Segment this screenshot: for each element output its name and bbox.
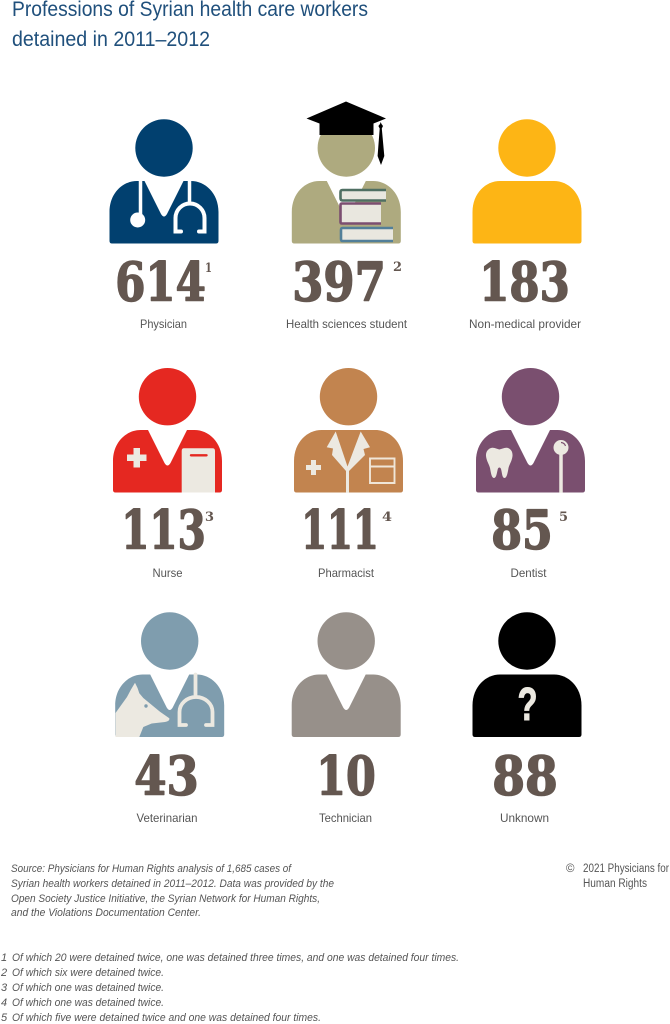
number: 614: 614: [115, 251, 206, 313]
panel: dentist: [476, 368, 585, 580]
icon: dentist figure with tooth and mirror: [476, 368, 585, 493]
footnotes: Of which 20 were detained twice, one was detained three times, and one was detained four times.: [12, 952, 459, 964]
footnotes: 1: [1, 952, 7, 964]
icon: veterinarian figure with dog and stethoscope: [115, 612, 224, 737]
number: 10: 10: [316, 745, 376, 807]
source note: Source: Physicians for Human Rights analysis of 1,685 cases of: [11, 863, 292, 875]
icon: non-medical figure: [472, 119, 582, 244]
number: 113: 113: [121, 499, 206, 561]
icon: nurse figure with cross and clipboard: [113, 368, 222, 492]
label: unknown: Unknown: [500, 811, 549, 825]
icon: pharmacist figure with lab coat: [294, 368, 403, 493]
footnotes: 4: [1, 997, 7, 1009]
panel: nurse: [113, 368, 222, 580]
number: 397: 397: [292, 251, 386, 313]
footnote marker 3: 3: [205, 510, 214, 525]
copyright: [566, 863, 669, 890]
source note: [11, 863, 334, 919]
panel: veterinarian: [115, 612, 224, 825]
footnotes: Of which one was detained twice.: [12, 982, 164, 994]
icon: physician figure with stethoscope: [110, 119, 218, 244]
panel: unknown: [472, 612, 582, 825]
footnotes: 2: [0, 967, 7, 979]
source note: Open Society Justice Initiative, the Syrian Network for Human Rights,: [11, 893, 320, 905]
source note: Syrian health workers detained in 2011–2012. Data was provided by the: [11, 878, 334, 890]
label: veterinarian: Veterinarian: [136, 811, 198, 825]
footnotes: 3: [1, 982, 8, 994]
label: health sciences student: Health sciences student: [286, 317, 408, 331]
copyright: ©: [566, 863, 575, 875]
title: [12, 0, 368, 51]
label: physician: Physician: [140, 317, 187, 331]
footnote marker 5: 5: [559, 510, 568, 525]
footnote marker 2: 2: [393, 260, 402, 275]
footnote marker 1: 1: [205, 261, 212, 276]
footnotes: 5: [1, 1012, 8, 1024]
label: nurse: Nurse: [152, 566, 183, 580]
panel: pharmacist: [294, 368, 403, 580]
number: 85: 85: [491, 499, 553, 561]
panel: technician: [292, 612, 401, 825]
footnote marker 4: 4: [382, 510, 392, 525]
title: detained in 2011–2012: [12, 28, 210, 51]
icon: technician figure: [292, 612, 401, 737]
source note: and the Violations Documentation Center.: [11, 907, 201, 919]
label: pharmacist: Pharmacist: [318, 566, 375, 580]
footnotes: [0, 952, 459, 1024]
number: 88: 88: [492, 745, 558, 807]
label: non-medical provider: Non-medical provider: [469, 317, 581, 331]
panel: physician: [110, 119, 218, 331]
panel: health sciences student: [286, 102, 408, 331]
panel: non-medical provider: [469, 119, 582, 331]
icon: unknown figure with question mark: [472, 612, 582, 737]
footnotes: Of which one was detained twice.: [12, 997, 164, 1009]
number: 111: 111: [301, 499, 379, 561]
number: 183: 183: [479, 251, 570, 313]
copyright: Human Rights: [583, 878, 647, 890]
label: technician: Technician: [319, 811, 372, 825]
icon: student figure with cap and books: [292, 102, 401, 244]
number: 43: 43: [134, 745, 199, 807]
footnotes: Of which five were detained twice and one was detained four times.: [12, 1012, 321, 1024]
footnotes: Of which six were detained twice.: [12, 967, 164, 979]
label: dentist: Dentist: [510, 566, 547, 580]
icon: unknown figure with question mark: ?: [518, 678, 538, 730]
